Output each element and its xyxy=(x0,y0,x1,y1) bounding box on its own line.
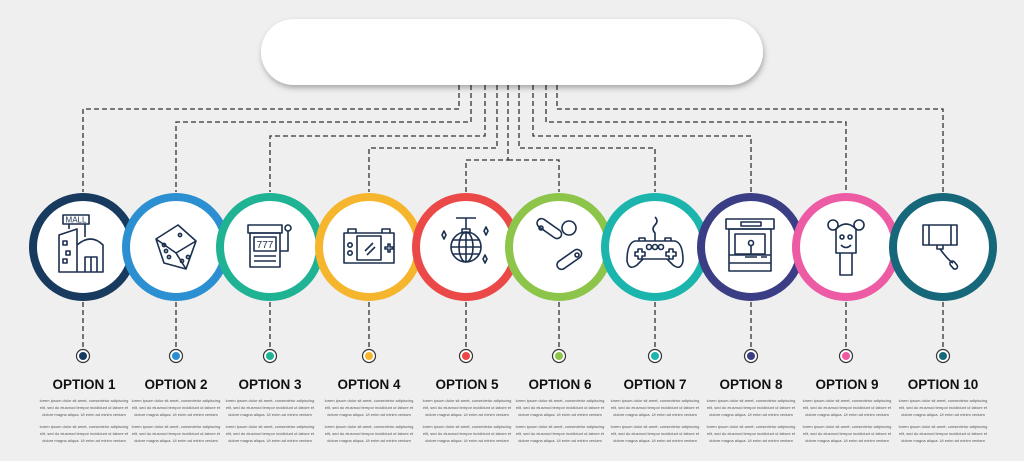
icon: pinball flippers xyxy=(535,217,583,271)
description texts: lorem ipsum dolor sit amet, consectetur adipiscing xyxy=(611,398,699,403)
icon: disco ball xyxy=(442,218,488,263)
description texts: lorem ipsum dolor sit amet, consectetur adipiscing xyxy=(899,398,987,403)
title pill xyxy=(261,19,763,85)
description texts: dolore magna aliqua. Ut enim ad minim veniam xyxy=(228,412,312,417)
option labels: OPTION 5 xyxy=(435,377,499,392)
description texts: lorem ipsum dolor sit amet, consectetur adipiscing xyxy=(325,424,413,429)
description texts: lorem ipsum dolor sit amet, consectetur adipiscing xyxy=(423,424,511,429)
option labels: OPTION 8 xyxy=(719,377,783,392)
dots xyxy=(76,350,950,362)
description texts: elit, sed do eiusmod tempor incididunt ut labore et xyxy=(899,405,988,410)
description texts: elit, sed do eiusmod tempor incididunt ut labore et xyxy=(516,431,605,436)
icon: slot machine xyxy=(248,225,291,267)
icon: mall: MALL xyxy=(66,216,87,224)
description texts: lorem ipsum dolor sit amet, consectetur adipiscing xyxy=(516,424,604,429)
description texts: dolore magna aliqua. Ut enim ad minim veniam xyxy=(613,438,697,443)
description texts: lorem ipsum dolor sit amet, consectetur adipiscing xyxy=(226,424,314,429)
description texts: elit, sed do eiusmod tempor incididunt ut labore et xyxy=(226,431,315,436)
description texts: dolore magna aliqua. Ut enim ad minim veniam xyxy=(709,412,793,417)
description texts: elit, sed do eiusmod tempor incididunt ut labore et xyxy=(707,431,796,436)
description texts: elit, sed do eiusmod tempor incididunt ut labore et xyxy=(226,405,315,410)
icon: slot machine: 777 xyxy=(257,240,274,251)
description texts: lorem ipsum dolor sit amet, consectetur adipiscing xyxy=(803,424,891,429)
description texts: lorem ipsum dolor sit amet, consectetur adipiscing xyxy=(611,424,699,429)
description texts: lorem ipsum dolor sit amet, consectetur adipiscing xyxy=(707,424,795,429)
description texts: dolore magna aliqua. Ut enim ad minim veniam xyxy=(425,438,509,443)
option labels: OPTION 10 xyxy=(908,377,978,392)
description texts: elit, sed do eiusmod tempor incididunt ut labore et xyxy=(899,431,988,436)
circles xyxy=(33,197,993,297)
option labels: OPTION 4 xyxy=(337,377,401,392)
description texts: dolore magna aliqua. Ut enim ad minim veniam xyxy=(134,412,218,417)
description texts: elit, sed do eiusmod tempor incididunt ut labore et xyxy=(325,431,414,436)
description texts: dolore magna aliqua. Ut enim ad minim veniam xyxy=(228,438,312,443)
option labels: OPTION 7 xyxy=(623,377,687,392)
icon: handheld console xyxy=(344,229,394,263)
icons xyxy=(59,215,959,275)
description texts: lorem ipsum dolor sit amet, consectetur adipiscing xyxy=(516,398,604,403)
description texts xyxy=(40,398,988,443)
description texts: elit, sed do eiusmod tempor incididunt ut labore et xyxy=(325,405,414,410)
description texts: dolore magna aliqua. Ut enim ad minim veniam xyxy=(901,438,985,443)
description texts: lorem ipsum dolor sit amet, consectetur adipiscing xyxy=(803,398,891,403)
description texts: elit, sed do eiusmod tempor incididunt ut labore et xyxy=(803,405,892,410)
icon: arcade xyxy=(726,219,774,271)
icon: dice xyxy=(156,225,196,269)
description texts: elit, sed do eiusmod tempor incididunt ut labore et xyxy=(611,431,700,436)
description texts: dolore magna aliqua. Ut enim ad minim veniam xyxy=(709,438,793,443)
description texts: elit, sed do eiusmod tempor incididunt ut labore et xyxy=(516,405,605,410)
description texts: lorem ipsum dolor sit amet, consectetur adipiscing xyxy=(40,424,128,429)
option labels: OPTION 3 xyxy=(238,377,302,392)
option labels: OPTION 2 xyxy=(144,377,208,392)
description texts: dolore magna aliqua. Ut enim ad minim veniam xyxy=(42,412,126,417)
description texts: dolore magna aliqua. Ut enim ad minim veniam xyxy=(327,412,411,417)
option labels: OPTION 9 xyxy=(815,377,879,392)
description texts: lorem ipsum dolor sit amet, consectetur adipiscing xyxy=(325,398,413,403)
option labels: OPTION 1 xyxy=(52,377,116,392)
description texts: elit, sed do eiusmod tempor incididunt ut labore et xyxy=(707,405,796,410)
icon: gamepad xyxy=(627,217,683,267)
description texts: elit, sed do eiusmod tempor incididunt ut labore et xyxy=(132,405,221,410)
option labels: OPTION 6 xyxy=(528,377,592,392)
option labels xyxy=(52,377,978,392)
description texts: elit, sed do eiusmod tempor incididunt ut labore et xyxy=(40,431,129,436)
description texts: lorem ipsum dolor sit amet, consectetur adipiscing xyxy=(707,398,795,403)
description texts: elit, sed do eiusmod tempor incididunt ut labore et xyxy=(40,405,129,410)
description texts: dolore magna aliqua. Ut enim ad minim veniam xyxy=(425,412,509,417)
icon: puppet xyxy=(828,220,864,275)
connectors xyxy=(83,85,943,349)
description texts: dolore magna aliqua. Ut enim ad minim veniam xyxy=(327,438,411,443)
icon: selfie stick xyxy=(923,225,959,270)
icon: mall xyxy=(59,215,103,272)
description texts: lorem ipsum dolor sit amet, consectetur adipiscing xyxy=(132,424,220,429)
description texts: dolore magna aliqua. Ut enim ad minim veniam xyxy=(134,438,218,443)
description texts: elit, sed do eiusmod tempor incididunt ut labore et xyxy=(423,431,512,436)
description texts: elit, sed do eiusmod tempor incididunt ut labore et xyxy=(611,405,700,410)
description texts: dolore magna aliqua. Ut enim ad minim veniam xyxy=(805,438,889,443)
description texts: lorem ipsum dolor sit amet, consectetur adipiscing xyxy=(226,398,314,403)
description texts: elit, sed do eiusmod tempor incididunt ut labore et xyxy=(803,431,892,436)
description texts: lorem ipsum dolor sit amet, consectetur adipiscing xyxy=(423,398,511,403)
description texts: dolore magna aliqua. Ut enim ad minim veniam xyxy=(613,412,697,417)
description texts: dolore magna aliqua. Ut enim ad minim veniam xyxy=(901,412,985,417)
description texts: elit, sed do eiusmod tempor incididunt ut labore et xyxy=(132,431,221,436)
description texts: lorem ipsum dolor sit amet, consectetur adipiscing xyxy=(899,424,987,429)
description texts: lorem ipsum dolor sit amet, consectetur adipiscing xyxy=(132,398,220,403)
description texts: elit, sed do eiusmod tempor incididunt ut labore et xyxy=(423,405,512,410)
description texts: lorem ipsum dolor sit amet, consectetur adipiscing xyxy=(40,398,128,403)
description texts: dolore magna aliqua. Ut enim ad minim veniam xyxy=(518,412,602,417)
description texts: dolore magna aliqua. Ut enim ad minim veniam xyxy=(42,438,126,443)
description texts: dolore magna aliqua. Ut enim ad minim veniam xyxy=(518,438,602,443)
description texts: dolore magna aliqua. Ut enim ad minim veniam xyxy=(805,412,889,417)
